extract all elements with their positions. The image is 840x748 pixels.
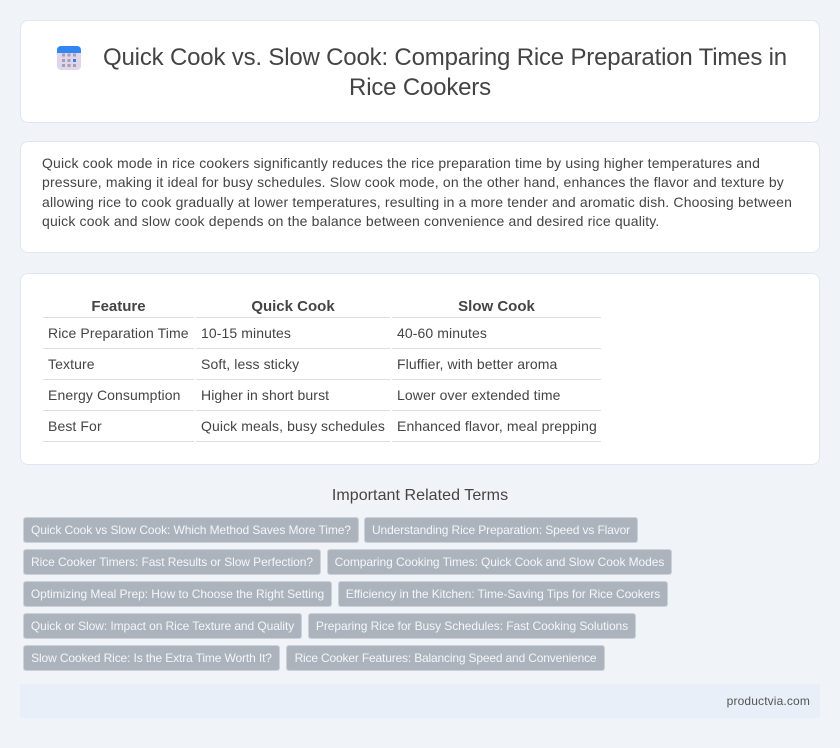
row: Texture: Texture: [48, 356, 95, 372]
footer bar: [20, 684, 820, 718]
tag: [23, 645, 280, 671]
intro paragraph: quick cook and slow cook depends on the balance between convenience and desired rice quality.: [42, 213, 659, 229]
tag: Slow Cooked Rice: Is the Extra Time Worth It?: [31, 651, 272, 665]
tag: [23, 517, 359, 543]
intro paragraph: Quick cook mode in rice cookers significantly reduces the rice preparation time by using higher temperatures and: [42, 155, 760, 171]
tag: [327, 549, 672, 575]
tag: Rice Cooker Features: Balancing Speed and Convenience: [295, 651, 596, 665]
title: Quick Cook vs. Slow Cook: Comparing Rice Preparation Times in: [103, 44, 787, 71]
related terms heading: Important Related Terms: [332, 487, 508, 504]
tag: [23, 581, 332, 607]
tag: [338, 581, 668, 607]
row: Energy Consumption: Higher in short burst: [201, 387, 329, 403]
header panel: [20, 20, 820, 123]
tag: Quick Cook vs Slow Cook: Which Method Saves More Time?: [31, 523, 351, 537]
title: [103, 44, 787, 101]
row: Energy Consumption: [48, 387, 560, 403]
row: Texture: [48, 356, 558, 372]
tag: Rice Cooker Timers: Fast Results or Slow Perfection?: [31, 555, 313, 569]
header: Quick Cook: Quick Cook: [251, 298, 335, 315]
comparison table panel: [20, 273, 820, 465]
row: Energy Consumption: Energy Consumption: [48, 387, 181, 403]
related terms tags: [23, 517, 672, 671]
tag: Preparing Rice for Busy Schedules: Fast Cooking Solutions: [316, 619, 628, 633]
icon: calendar: [57, 46, 81, 70]
row: Best For: [48, 418, 597, 434]
row: Rice Preparation Time: 10-15 minutes: [201, 325, 291, 341]
row: Texture: Soft, less sticky: [201, 356, 299, 372]
header: Slow Cook: Slow Cook: [458, 298, 535, 315]
tag: [286, 645, 605, 671]
intro text panel: [20, 141, 820, 253]
row: Rice Preparation Time: 40-60 minutes: [397, 325, 487, 341]
row: Energy Consumption: Lower over extended time: [397, 387, 560, 403]
comparison table: [43, 298, 601, 442]
row: Best For: Quick meals, busy schedules: [201, 418, 385, 434]
tag: [23, 549, 321, 575]
tag: Optimizing Meal Prep: How to Choose the Right Setting: [31, 587, 324, 601]
row: Best For: Enhanced flavor, meal prepping: [397, 418, 597, 434]
tag: [364, 517, 638, 543]
tag: Efficiency in the Kitchen: Time-Saving Tips for Rice Cookers: [346, 587, 660, 601]
title: Rice Cookers: [349, 74, 491, 101]
row: Rice Preparation Time: Rice Preparation Time: [48, 325, 189, 341]
header: Feature: Feature: [91, 298, 146, 315]
tag: Quick or Slow: Impact on Rice Texture and Quality: [31, 619, 294, 633]
tag: Understanding Rice Preparation: Speed vs Flavor: [372, 523, 630, 537]
footer source text: productvia.com: [727, 694, 810, 708]
intro paragraph: pressure, making it ideal for busy schedules. Slow cook mode, on the other hand, enhances the flavor and texture by: [42, 174, 784, 190]
row: Rice Preparation Time: [48, 325, 487, 341]
tag: Comparing Cooking Times: Quick Cook and Slow Cook Modes: [335, 555, 664, 569]
row: Texture: Fluffier, with better aroma: [397, 356, 557, 372]
intro paragraph: [42, 155, 792, 229]
intro paragraph: allowing rice to cook gradually at lower temperatures, resulting in a more tender and aromatic dish. Choosing between: [42, 194, 792, 210]
tag: [23, 613, 302, 639]
tag: [308, 613, 636, 639]
row: Best For: Best For: [48, 418, 102, 434]
